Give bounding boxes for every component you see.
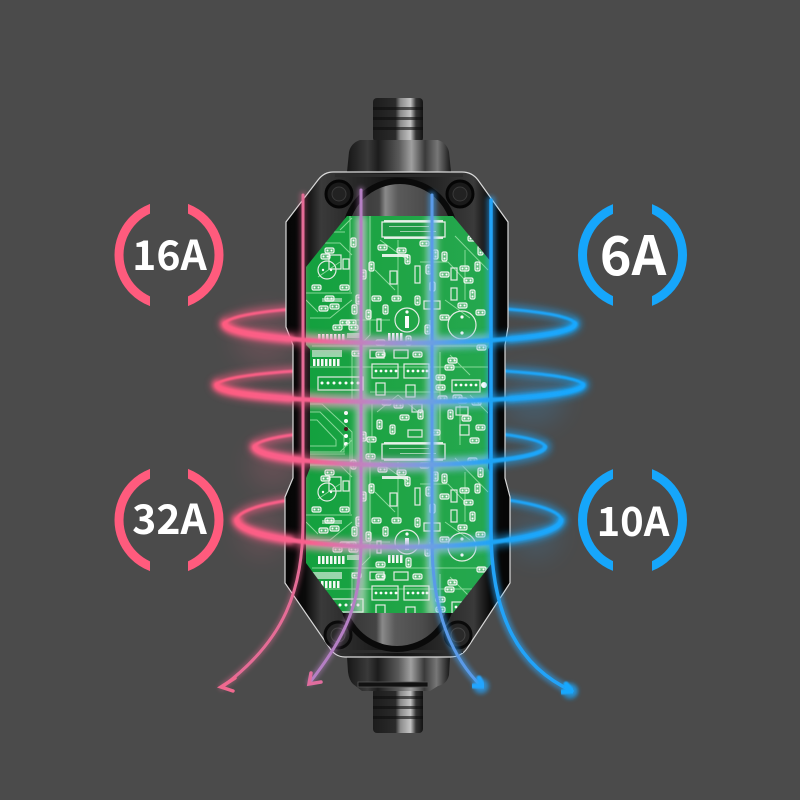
screw: bottom left — [325, 622, 351, 648]
badge: 6A — [582, 205, 682, 305]
bottom thread — [373, 688, 423, 733]
badge: 32A: 32A — [132, 486, 208, 546]
screw: top left — [326, 181, 352, 207]
badge: 32A — [119, 470, 219, 570]
ring 2 — [217, 385, 583, 402]
ring 3 — [255, 447, 545, 465]
top thread — [373, 98, 423, 142]
badge: 6A: 6A — [600, 212, 667, 291]
airflow lines — [221, 190, 578, 699]
badge: 10A: 10A — [597, 490, 670, 548]
rings: front arcs — [217, 324, 583, 547]
badge: 10A — [582, 470, 682, 570]
bottom nut — [347, 657, 450, 691]
ring 1 — [225, 324, 575, 343]
ring 4 — [237, 520, 561, 547]
bottom opening with cylinder — [342, 611, 452, 652]
purple airflow line with arrow — [309, 190, 361, 684]
badge: 16A — [119, 205, 219, 305]
rings: back arcs — [217, 305, 583, 520]
top nut — [347, 140, 451, 172]
circuit board — [306, 216, 491, 613]
device: housing — [285, 172, 510, 657]
badge: 16A: 16A — [132, 222, 208, 282]
light blue airflow line with arrow — [491, 200, 578, 699]
blue airflow line with arrow — [432, 195, 489, 694]
screw: bottom right — [445, 622, 471, 648]
faded highlight strips on the board — [306, 216, 490, 613]
screw: top right — [447, 181, 473, 207]
pink airflow line with arrow — [221, 195, 303, 691]
device: top connector — [347, 98, 451, 172]
device: bottom connector — [347, 657, 450, 733]
top opening with cylinder — [344, 178, 456, 219]
faint glow discs behind the rings — [235, 310, 564, 559]
